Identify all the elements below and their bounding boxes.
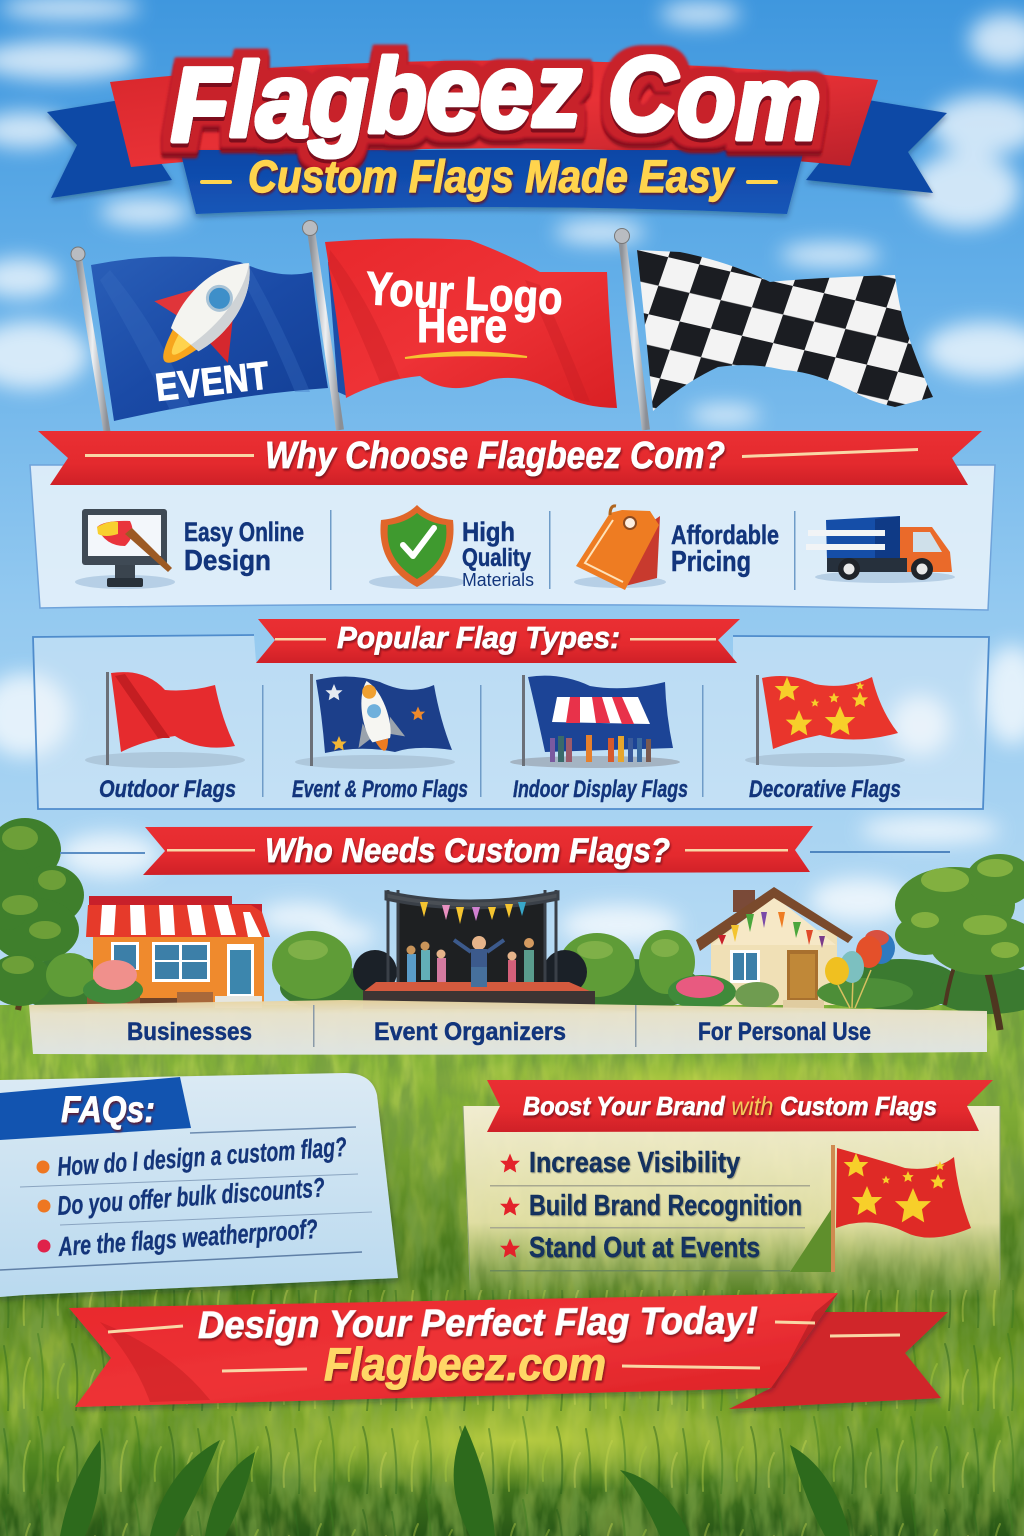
panel: FAQs: How do I design a custom flag? bbox=[56, 1132, 348, 1182]
who needs strip with labels: Event Organizers bbox=[374, 1018, 566, 1046]
who needs strip with labels bbox=[29, 1000, 987, 1055]
why choose banner: Why Choose Flagbeez Com? bbox=[265, 435, 725, 477]
who needs strip with labels: Businesses bbox=[127, 1018, 252, 1046]
panel: boost your brand: Stand Out at Events bbox=[529, 1232, 760, 1264]
who needs strip with labels: For Personal Use bbox=[698, 1018, 871, 1046]
flag: checkered racing flag bbox=[614, 228, 940, 430]
FAQs tab bbox=[0, 1077, 191, 1140]
who needs banner: Who Needs Custom Flags? bbox=[265, 832, 670, 870]
flag type: outdoor: Outdoor Flags bbox=[99, 776, 236, 803]
flag: red Your Logo Here flag: Here bbox=[417, 299, 507, 352]
flag: blue EVENT flag with rocket bbox=[71, 232, 328, 432]
flag type: indoor display bbox=[510, 675, 688, 803]
subtitle text: Custom Flags Made Easy bbox=[248, 151, 735, 202]
panel: FAQs: Do you offer bulk discounts? bbox=[56, 1172, 326, 1221]
feature: affordable pricing: Affordable bbox=[671, 520, 779, 550]
call to action ribbon: Design Your Perfect Flag Today! bbox=[198, 1300, 758, 1347]
feature: affordable pricing bbox=[574, 506, 779, 590]
panel: FAQs: Are the flags weatherproof? bbox=[57, 1214, 319, 1262]
illustration: concert stage for event organizers bbox=[353, 890, 595, 1009]
left blue ribbon tail bbox=[47, 100, 172, 198]
panel: FAQs bbox=[0, 1073, 398, 1297]
rocket icon bbox=[129, 232, 286, 393]
flag type: decorative bbox=[745, 675, 905, 803]
flag type: outdoor bbox=[85, 672, 245, 803]
feature: high quality materials bbox=[369, 505, 534, 590]
feature: delivery truck bbox=[806, 516, 955, 583]
feature: high quality materials: Quality bbox=[462, 544, 531, 572]
title text: Flagbeez Com bbox=[171, 32, 821, 164]
flag: red Your Logo Here flag bbox=[302, 220, 617, 430]
performers bbox=[406, 936, 534, 987]
illustration: shop for businesses bbox=[83, 896, 270, 1009]
red star flag bbox=[831, 1145, 971, 1272]
balloons bbox=[825, 930, 895, 1008]
panel: boost your brand bbox=[463, 1080, 1000, 1300]
feature: easy online design: Design bbox=[184, 545, 271, 577]
feature: easy online design: Easy Online bbox=[184, 517, 304, 547]
panel: boost your brand: Increase Visibility bbox=[529, 1147, 740, 1179]
panel: popular flag types bbox=[33, 619, 989, 809]
boost banner bbox=[487, 1080, 993, 1132]
who needs banner bbox=[60, 826, 950, 875]
panel: boost your brand: Boost Your Brand with Custom Flags bbox=[523, 1091, 937, 1121]
flag type: event and promo bbox=[292, 674, 468, 803]
call to action ribbon: Flagbeez.com bbox=[324, 1338, 606, 1390]
panel: FAQs: FAQs: bbox=[61, 1089, 155, 1130]
feature: high quality materials: Materials bbox=[462, 570, 534, 590]
call to action ribbon bbox=[69, 1293, 948, 1409]
popular flag types banner bbox=[256, 619, 740, 663]
why choose banner bbox=[38, 431, 982, 485]
panel: why choose bbox=[30, 431, 995, 610]
background: sky bbox=[0, 0, 1024, 1100]
flag type: decorative: Decorative Flags bbox=[749, 776, 901, 803]
illustration: house for personal use bbox=[668, 887, 913, 1009]
background: grass field bbox=[0, 1005, 1024, 1536]
flag type: event and promo: Event & Promo Flags bbox=[292, 776, 468, 803]
panel: boost your brand: Build Brand Recognition bbox=[529, 1190, 802, 1222]
scene trees bbox=[0, 818, 1024, 1030]
popular flag types banner: Popular Flag Types: bbox=[337, 620, 620, 655]
feature: easy online design bbox=[75, 509, 304, 589]
blue subtitle panel bbox=[180, 150, 804, 214]
logo text: Your Logo bbox=[364, 261, 564, 324]
feature: high quality materials: High bbox=[462, 517, 515, 547]
title banner bbox=[47, 32, 947, 214]
EVENT label: EVENT bbox=[153, 354, 271, 410]
feature: affordable pricing: Pricing bbox=[671, 546, 751, 578]
right blue ribbon tail bbox=[806, 100, 947, 193]
red arched ribbon bbox=[110, 60, 878, 167]
flag type: indoor display: Indoor Display Flags bbox=[513, 776, 688, 803]
